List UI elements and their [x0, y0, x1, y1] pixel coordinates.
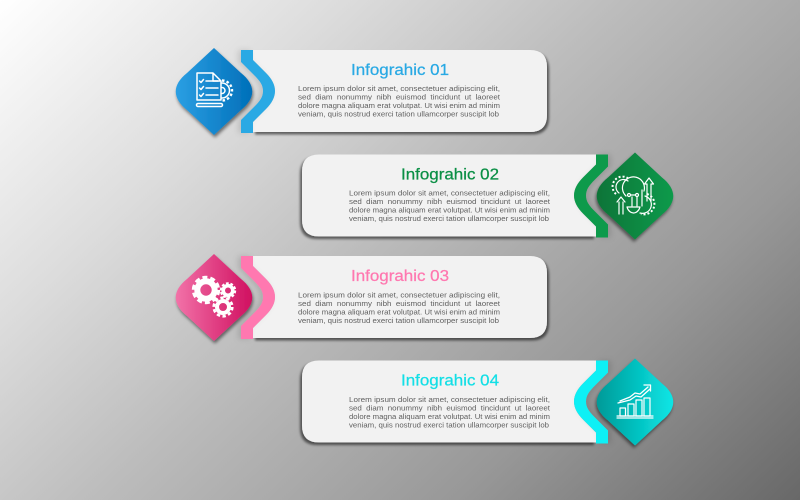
icon: checklist document with gear and pencil	[196, 73, 232, 106]
card 01 diamond badge	[176, 48, 252, 135]
body text 04: dolore magna aliquam erat volutpat. Ut wisi enim ad minim	[349, 412, 550, 421]
body text 03: dolore magna aliquam erat volutpat. Ut wisi enim ad minim	[298, 308, 500, 316]
panel: infographic 01	[176, 48, 547, 135]
heading: Infograhic 02: Infograhic 02	[401, 166, 499, 184]
heading: Infograhic 01: Infograhic 01	[351, 62, 449, 79]
body text 02: sed diam nonummy nibh euismod tincidunt ut laoreet	[349, 197, 551, 206]
card 02 diamond badge	[597, 152, 673, 240]
body text 03: sed diam nonummy nibh euismod tincidunt ut laoreet	[298, 299, 501, 308]
body text 02	[349, 188, 551, 223]
icon: three gears	[193, 277, 235, 316]
body text 01: Lorem ipsum dolor sit amet, consectetuer adipiscing elit,	[298, 84, 500, 93]
panel: infographic 03	[176, 254, 547, 341]
card 03 diamond badge	[176, 254, 252, 341]
body text 01: dolore magna aliquam erat volutpat. Ut wisi enim ad minim	[298, 101, 500, 110]
card 04 shape	[302, 360, 596, 442]
card 04 diamond badge	[597, 358, 673, 446]
panel: infographic 04	[302, 358, 673, 446]
body text 01: sed diam nonummy nibh euismod tincidunt ut laoreet	[298, 92, 501, 102]
card 01 shape	[253, 50, 547, 132]
icon: rising bar chart with arrow	[617, 385, 653, 418]
body text 04: sed diam nonummy nibh euismod tincidunt ut laoreet	[349, 404, 551, 412]
body text 03: Lorem ipsum dolor sit amet, consectetuer adipiscing elit,	[298, 290, 500, 300]
body text 04: Lorem ipsum dolor sit amet, consectetuer adipiscing elit,	[349, 395, 550, 404]
body text 04: veniam, quis nostrud exerci tation ullamcorper suscipit lob	[349, 420, 549, 430]
body text 02: dolore magna aliquam erat volutpat. Ut wisi enim ad minim	[349, 206, 550, 214]
icon: gears, flask and up arrows	[613, 177, 654, 214]
body text 04	[349, 395, 551, 430]
panel: infographic 02	[302, 152, 673, 240]
body text 01	[298, 84, 501, 118]
card 01 ribbon tab	[241, 50, 275, 133]
heading: Infograhic 03: Infograhic 03	[351, 268, 449, 285]
card 03 ribbon tab	[241, 256, 275, 339]
body text 03: veniam, quis nostrud exerci tation ullamcorper suscipit lob	[298, 316, 499, 325]
card 02 shape	[302, 154, 596, 236]
heading: Infograhic 04: Infograhic 04	[401, 372, 499, 390]
body text 01: veniam, quis nostrud exerci tation ullamcorper suscipit lob	[298, 110, 499, 118]
body text 02: veniam, quis nostrud exerci tation ullamcorper suscipit lob	[349, 214, 549, 223]
card 02 ribbon tab	[574, 154, 608, 238]
body text 03	[298, 290, 501, 325]
card 03 shape	[253, 256, 547, 338]
body text 02: Lorem ipsum dolor sit amet, consectetuer adipiscing elit,	[349, 188, 550, 198]
card 04 ribbon tab	[574, 360, 608, 444]
